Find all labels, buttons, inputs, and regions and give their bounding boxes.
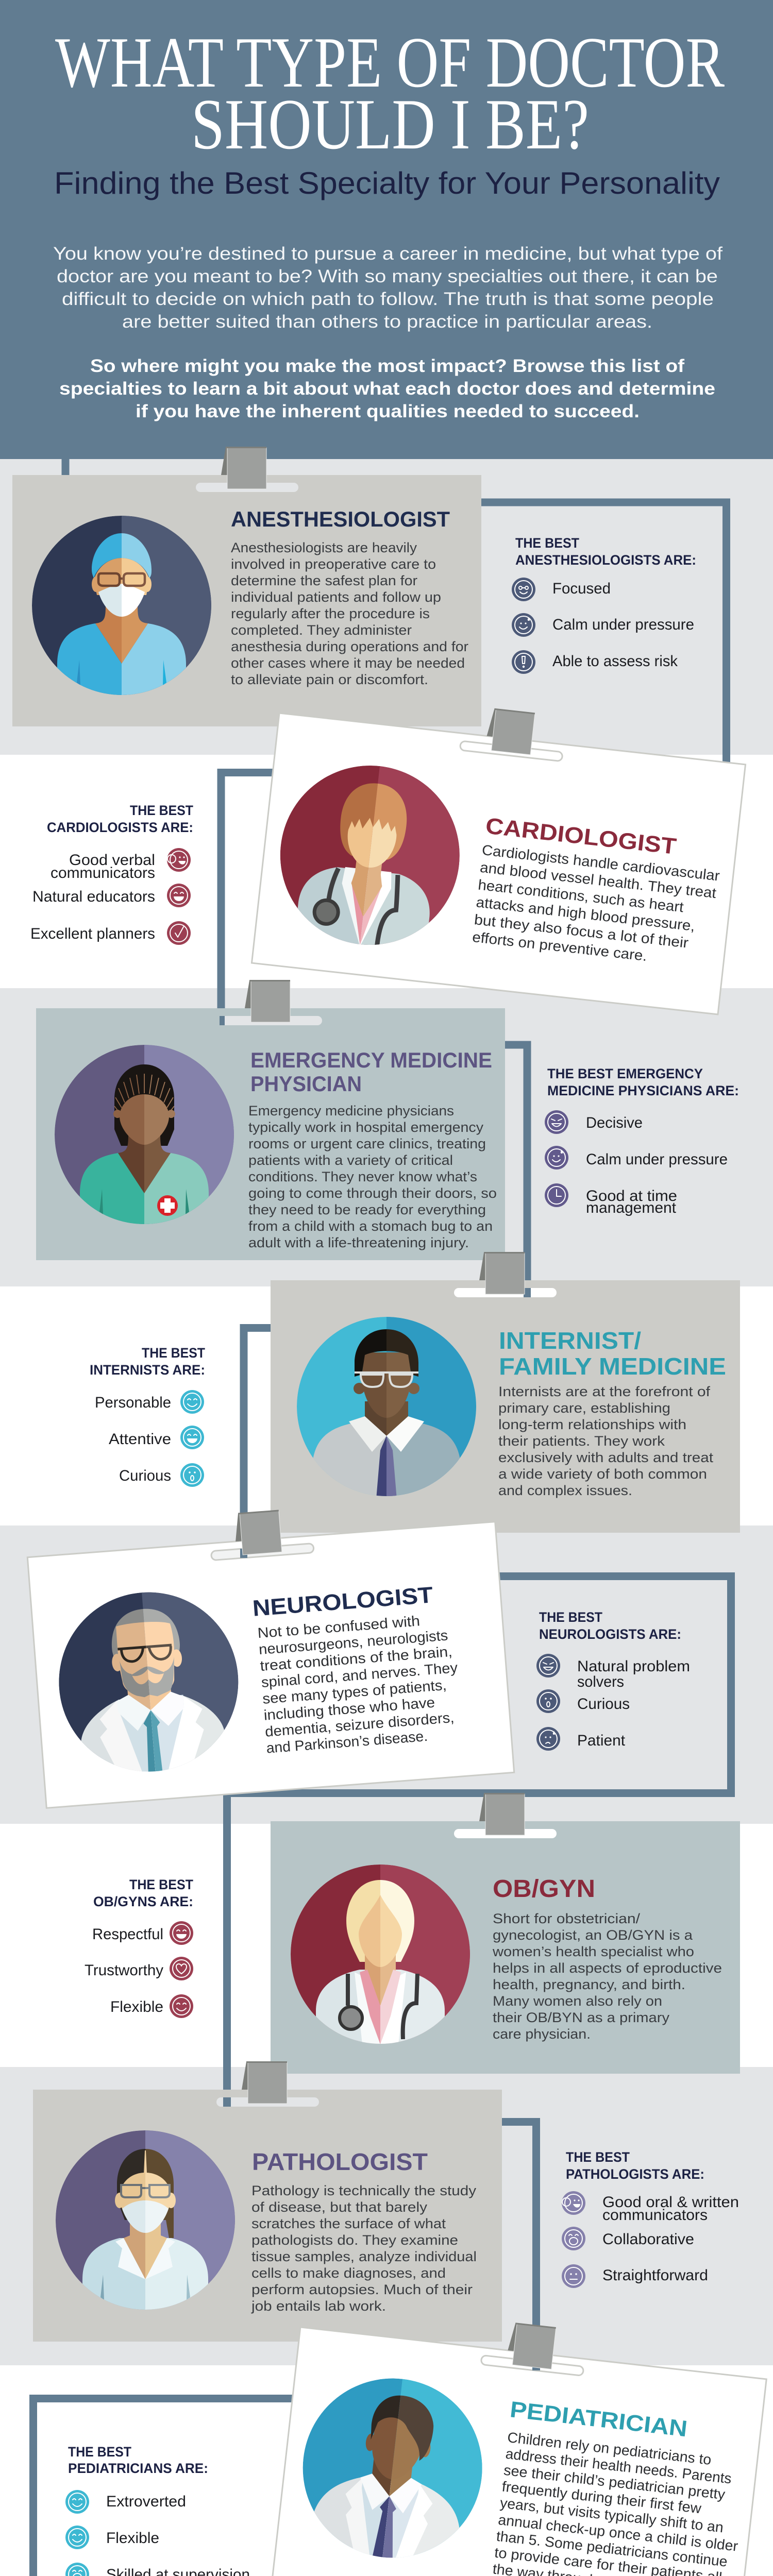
icon: problem solvers bbox=[536, 1654, 560, 1677]
list: best internists: Attentive bbox=[109, 1431, 171, 1448]
icon: decisive bbox=[545, 1110, 568, 1134]
list: best internists: Personable bbox=[95, 1394, 171, 1411]
icon: patient bbox=[536, 1727, 560, 1751]
avatar: cardiologist bbox=[280, 766, 460, 945]
list: best emergency physicians: management bbox=[586, 1199, 677, 1216]
heading: EMERGENCY MEDICINE bbox=[250, 1048, 492, 1072]
description: Emergency medicine physicians bbox=[248, 1103, 454, 1118]
description: long-term relationships with bbox=[498, 1417, 686, 1432]
list: best OB/GYNs bbox=[85, 1877, 193, 2018]
list: best cardiologists: THE BEST bbox=[130, 803, 193, 818]
description: adult with a life-threatening injury. bbox=[248, 1235, 469, 1250]
heading: PEDIATRICIAN bbox=[509, 2397, 688, 2442]
list: best pathologists: Collaborative bbox=[602, 2231, 694, 2248]
list: best cardiologists: Natural educators bbox=[32, 888, 155, 905]
icon: time management bbox=[545, 1183, 568, 1207]
list: best neurologists: solvers bbox=[577, 1673, 624, 1690]
description bbox=[257, 1610, 463, 1756]
heading: INTERNIST/ bbox=[499, 1327, 641, 1354]
description: other cases where it may be needed bbox=[231, 655, 465, 671]
list: best cardiologists: communicators bbox=[51, 865, 155, 882]
description: typically work in hospital emergency bbox=[248, 1120, 484, 1135]
icon: trustworthy bbox=[170, 1957, 193, 1980]
intro paragraph bbox=[53, 244, 722, 332]
description: cells to make diagnoses, and bbox=[251, 2265, 446, 2281]
list: best emergency physicians: Calm under pressure bbox=[586, 1151, 728, 1168]
list: best cardiologists: CARDIOLOGISTS ARE: bbox=[47, 820, 193, 835]
list: best pathologists: Straightforward bbox=[602, 2267, 708, 2284]
list: best pathologists: communicators bbox=[602, 2207, 708, 2224]
connector: anesthesiologist list bbox=[479, 502, 727, 770]
description: completed. They administer bbox=[231, 622, 412, 638]
list: best anesthesiologists bbox=[512, 535, 696, 674]
avatar: pathologist bbox=[56, 2130, 235, 2313]
description: frequently during their first few bbox=[501, 2478, 702, 2516]
avatar: OB/GYN bbox=[291, 1865, 470, 2047]
description: than 5. Some pediatricians continue bbox=[496, 2528, 728, 2570]
list: best anesthesiologists: THE BEST bbox=[515, 535, 579, 551]
list: best emergency physicians: Good at time bbox=[586, 1188, 677, 1205]
heading: ANESTHESIOLOGIST bbox=[231, 507, 450, 531]
description: conditions. They never know what’s bbox=[248, 1169, 477, 1184]
list: best pediatricians bbox=[65, 2444, 250, 2576]
avatar: neurologist bbox=[59, 1592, 238, 1772]
icon: assess risk bbox=[512, 650, 535, 674]
description: attacks and high blood pressure, bbox=[475, 894, 696, 934]
heading bbox=[499, 1327, 726, 1380]
description bbox=[498, 1384, 714, 1498]
description: going to come through their doors, so bbox=[248, 1185, 497, 1201]
title bbox=[55, 23, 725, 164]
description: of disease, but that barely bbox=[251, 2199, 428, 2215]
description: care physician. bbox=[493, 2026, 591, 2042]
description: neurosurgeons, neurologists bbox=[258, 1627, 448, 1657]
list: best pathologists bbox=[562, 2149, 739, 2288]
clip: pathologist bbox=[242, 2061, 287, 2104]
clip: cardiologist bbox=[485, 708, 535, 755]
avatar: anesthesiologist bbox=[32, 516, 211, 698]
description: Short for obstetrician/ bbox=[493, 1911, 641, 1926]
list: best cardiologists bbox=[30, 803, 193, 945]
list: best neurologists: Natural problem bbox=[577, 1658, 690, 1675]
icon: focused bbox=[512, 578, 535, 601]
intro paragraph: are better suited than others to practice in particular areas. bbox=[122, 312, 652, 332]
description: efforts on preventive care. bbox=[472, 929, 648, 964]
card: neurologist bbox=[27, 1522, 514, 1808]
description: helps in all aspects of eproductive bbox=[493, 1960, 722, 1976]
intro call to action bbox=[59, 356, 715, 421]
list: best internists: Curious bbox=[119, 1467, 171, 1484]
heading bbox=[250, 1048, 492, 1096]
icon: flexible bbox=[170, 1994, 193, 2018]
description: Pathology is technically the study bbox=[251, 2183, 477, 2198]
card: cardiologist bbox=[251, 713, 746, 1014]
description: heart conditions, such as heart bbox=[477, 876, 684, 915]
description: patients with a variety of critical bbox=[248, 1153, 453, 1168]
subtitle: Finding the Best Specialty for Your Personality bbox=[54, 166, 720, 200]
description: perform autopsies. Much of their bbox=[251, 2282, 473, 2297]
description: rooms or urgent care clinics, treating bbox=[248, 1136, 486, 1151]
list: best emergency physicians bbox=[545, 1066, 739, 1216]
description: Many women also rely on bbox=[493, 1993, 662, 2009]
description: address their health needs. Parents bbox=[505, 2446, 732, 2487]
clip: internist bbox=[479, 1252, 525, 1294]
icon: personable bbox=[180, 1390, 204, 1414]
description bbox=[492, 2429, 748, 2576]
heading: PHYSICIAN bbox=[250, 1072, 362, 1096]
connector tip in pathologist slot bbox=[223, 2097, 231, 2107]
list: best anesthesiologists: Able to assess risk bbox=[552, 653, 678, 670]
clip: neurologist bbox=[233, 1510, 282, 1555]
title: SHOULD I BE? bbox=[191, 84, 589, 164]
heading: CARDIOLOGIST bbox=[484, 813, 678, 859]
list: best neurologists: Patient bbox=[577, 1732, 626, 1749]
description: health, pregnancy, and birth. bbox=[493, 1977, 685, 1992]
description: Cardiologists handle cardiovascular bbox=[481, 842, 720, 884]
description: dementia, seizure disorders, bbox=[264, 1709, 455, 1740]
description: Children rely on pediatricians to bbox=[507, 2429, 712, 2468]
description: spinal cord, and nerves. They bbox=[261, 1659, 458, 1690]
section band 2 bbox=[0, 988, 773, 1286]
description: regularly after the procedure is bbox=[231, 606, 430, 621]
panel: OB/GYN bbox=[271, 1821, 740, 2074]
intro paragraph: difficult to decide on which path to follow. The truth is that some people bbox=[62, 289, 714, 309]
icon: supervision bbox=[65, 2563, 89, 2576]
description: and Parkinson’s disease. bbox=[266, 1728, 428, 1756]
list: best emergency physicians: Decisive bbox=[586, 1114, 643, 1131]
icon: verbal communicators bbox=[167, 848, 191, 872]
panel: anesthesiologist bbox=[12, 475, 481, 726]
connector: header to anesthesiologist bbox=[62, 456, 69, 477]
panel: pathologist bbox=[33, 2090, 502, 2342]
list: best internists bbox=[90, 1345, 205, 1487]
description: women’s health specialist who bbox=[492, 1944, 694, 1959]
description bbox=[231, 540, 468, 687]
list: best anesthesiologists: ANESTHESIOLOGISTS ARE: bbox=[515, 552, 696, 568]
list: best internists: THE BEST bbox=[142, 1345, 205, 1361]
icon: attentive bbox=[180, 1426, 204, 1449]
description: including those who have bbox=[263, 1694, 435, 1723]
list: best emergency physicians: THE BEST EMERGENCY bbox=[547, 1066, 703, 1081]
card: pediatrician bbox=[273, 2327, 766, 2576]
heading: FAMILY MEDICINE bbox=[499, 1353, 726, 1380]
icon: collaborative bbox=[562, 2227, 585, 2250]
connector: internist list bbox=[244, 1328, 273, 1561]
connector: neurologist and OB/GYN list bbox=[227, 1577, 731, 2092]
intro call to action: specialties to learn a bit about what each doctor does and determine bbox=[59, 379, 715, 399]
description: primary care, establishing bbox=[498, 1400, 670, 1416]
description: to alleviate pain or discomfort. bbox=[231, 672, 428, 687]
list: best OB/GYNs: OB/GYNS ARE: bbox=[93, 1894, 193, 1909]
connector: cardiologist list bbox=[221, 773, 289, 1018]
description: involved in preoperative care to bbox=[231, 556, 436, 572]
icon: calm bbox=[545, 1146, 568, 1170]
list: best neurologists bbox=[536, 1609, 690, 1751]
icon: flexible bbox=[65, 2526, 89, 2549]
list: best OB/GYNs: Flexible bbox=[110, 1998, 163, 2015]
heading: NEUROLOGIST bbox=[251, 1582, 434, 1621]
description bbox=[492, 1911, 722, 2042]
description: see many types of patients, bbox=[262, 1677, 447, 1707]
list: best OB/GYNs: Trustworthy bbox=[85, 1962, 163, 1979]
icon: curious bbox=[536, 1689, 560, 1713]
description: treat conditions of the brain, bbox=[259, 1643, 453, 1674]
list: best neurologists: Curious bbox=[577, 1696, 630, 1713]
section band 4 bbox=[0, 2067, 773, 2365]
list: best pathologists: Good oral & written bbox=[602, 2194, 739, 2211]
section band 1 bbox=[0, 459, 773, 755]
icon: straightforward bbox=[562, 2264, 585, 2288]
icon: curious bbox=[180, 1463, 204, 1487]
description: scratches the surface of what bbox=[251, 2216, 446, 2231]
connector: emergency list bbox=[502, 1045, 527, 1283]
intro call to action: if you have the inherent qualities needed to succeed. bbox=[136, 401, 640, 421]
list: best pediatricians: THE BEST bbox=[68, 2444, 131, 2460]
description: tissue samples, analyze individual bbox=[251, 2249, 477, 2264]
description: and blood vessel health. They treat bbox=[479, 859, 717, 901]
list: best pediatricians: PEDIATRICIANS ARE: bbox=[68, 2461, 208, 2476]
description: their patients. They work bbox=[498, 1433, 665, 1449]
clip: OB/GYN bbox=[479, 1793, 525, 1835]
header band bbox=[0, 0, 773, 459]
intro paragraph: You know you’re destined to pursue a career in medicine, but what type of bbox=[53, 244, 722, 264]
section band 3 bbox=[0, 1526, 773, 1824]
heading: OB/GYN bbox=[493, 1875, 595, 1903]
icon: communicators bbox=[562, 2191, 585, 2215]
list: best neurologists: NEUROLOGISTS ARE: bbox=[539, 1626, 681, 1642]
list: best cardiologists: Excellent planners bbox=[30, 925, 155, 942]
description: their OB/BYN as a primary bbox=[493, 2010, 670, 2025]
description: job entails lab work. bbox=[251, 2298, 386, 2314]
icon: extroverted bbox=[65, 2490, 89, 2514]
description: and complex issues. bbox=[498, 1483, 632, 1498]
description: a wide variety of both common bbox=[498, 1466, 707, 1482]
description: gynecologist, an OB/GYN is a bbox=[493, 1927, 693, 1943]
icon: calm bbox=[512, 613, 535, 637]
avatar: pediatrician bbox=[303, 2378, 482, 2557]
list: best cardiologists: Good verbal bbox=[69, 852, 155, 869]
icon: educators bbox=[167, 884, 191, 907]
intro call to action: So where might you make the most impact? Browse this list of bbox=[90, 356, 684, 376]
description: years, but visits typically shift to an bbox=[499, 2495, 725, 2535]
description: annual check-up once a child is older bbox=[497, 2512, 739, 2554]
clip: emergency bbox=[245, 980, 290, 1022]
connector: pathologist list bbox=[500, 2122, 536, 2380]
list: best anesthesiologists: Focused bbox=[552, 580, 611, 597]
list: best neurologists: THE BEST bbox=[539, 1609, 602, 1625]
description: pathologists do. They examine bbox=[251, 2232, 458, 2248]
description: Internists are at the forefront of bbox=[498, 1384, 711, 1399]
list: best internists: INTERNISTS ARE: bbox=[90, 1362, 205, 1378]
connector tip in neurologist slot bbox=[240, 1549, 247, 1558]
clip: pediatrician bbox=[506, 2322, 556, 2369]
icon: planners bbox=[167, 921, 191, 945]
list: best pathologists: PATHOLOGISTS ARE: bbox=[566, 2166, 704, 2182]
description: Anesthesiologists are heavily bbox=[231, 540, 417, 555]
intro paragraph: doctor are you meant to be? With so many specialties out there, it can be bbox=[57, 266, 718, 286]
list: best pediatricians: Extroverted bbox=[106, 2493, 186, 2510]
list: best pediatricians: Flexible bbox=[106, 2530, 159, 2547]
list: best emergency physicians: MEDICINE PHYSICIANS ARE: bbox=[547, 1083, 739, 1098]
description: from a child with a stomach bug to an bbox=[248, 1218, 493, 1234]
connector: pediatrician list bbox=[33, 2399, 309, 2576]
clip: anesthesiologist bbox=[221, 447, 266, 489]
connector tip in pediatrician slot bbox=[532, 2365, 540, 2370]
description: see their child’s pediatrician pretty bbox=[503, 2462, 726, 2502]
heading: PATHOLOGIST bbox=[252, 2148, 428, 2175]
description: individual patients and follow up bbox=[231, 589, 441, 605]
list: best anesthesiologists: Calm under pressure bbox=[552, 616, 694, 633]
description bbox=[248, 1103, 497, 1250]
description: Not to be confused with bbox=[257, 1613, 421, 1641]
description: determine the safest plan for bbox=[231, 573, 417, 588]
list: best OB/GYNs: Respectful bbox=[92, 1926, 163, 1943]
list: best pathologists: THE BEST bbox=[566, 2149, 630, 2165]
description bbox=[251, 2183, 477, 2314]
connector tip in internist slot bbox=[524, 1288, 531, 1297]
connector tip in emergency slot bbox=[220, 1016, 225, 1025]
icon: respectful bbox=[170, 1921, 193, 1945]
panel: emergency medicine physician bbox=[36, 1008, 505, 1260]
panel: internist bbox=[271, 1280, 740, 1533]
description bbox=[472, 842, 720, 971]
list: best OB/GYNs: THE BEST bbox=[129, 1877, 193, 1892]
avatar: internist bbox=[297, 1317, 476, 1499]
description: exclusively with adults and treat bbox=[498, 1450, 714, 1465]
description: they need to be ready for everything bbox=[248, 1202, 486, 1217]
description: but they also focus a lot of their bbox=[474, 911, 690, 951]
description: anesthesia during operations and for bbox=[231, 639, 468, 654]
avatar: emergency medicine physician bbox=[55, 1045, 234, 1227]
